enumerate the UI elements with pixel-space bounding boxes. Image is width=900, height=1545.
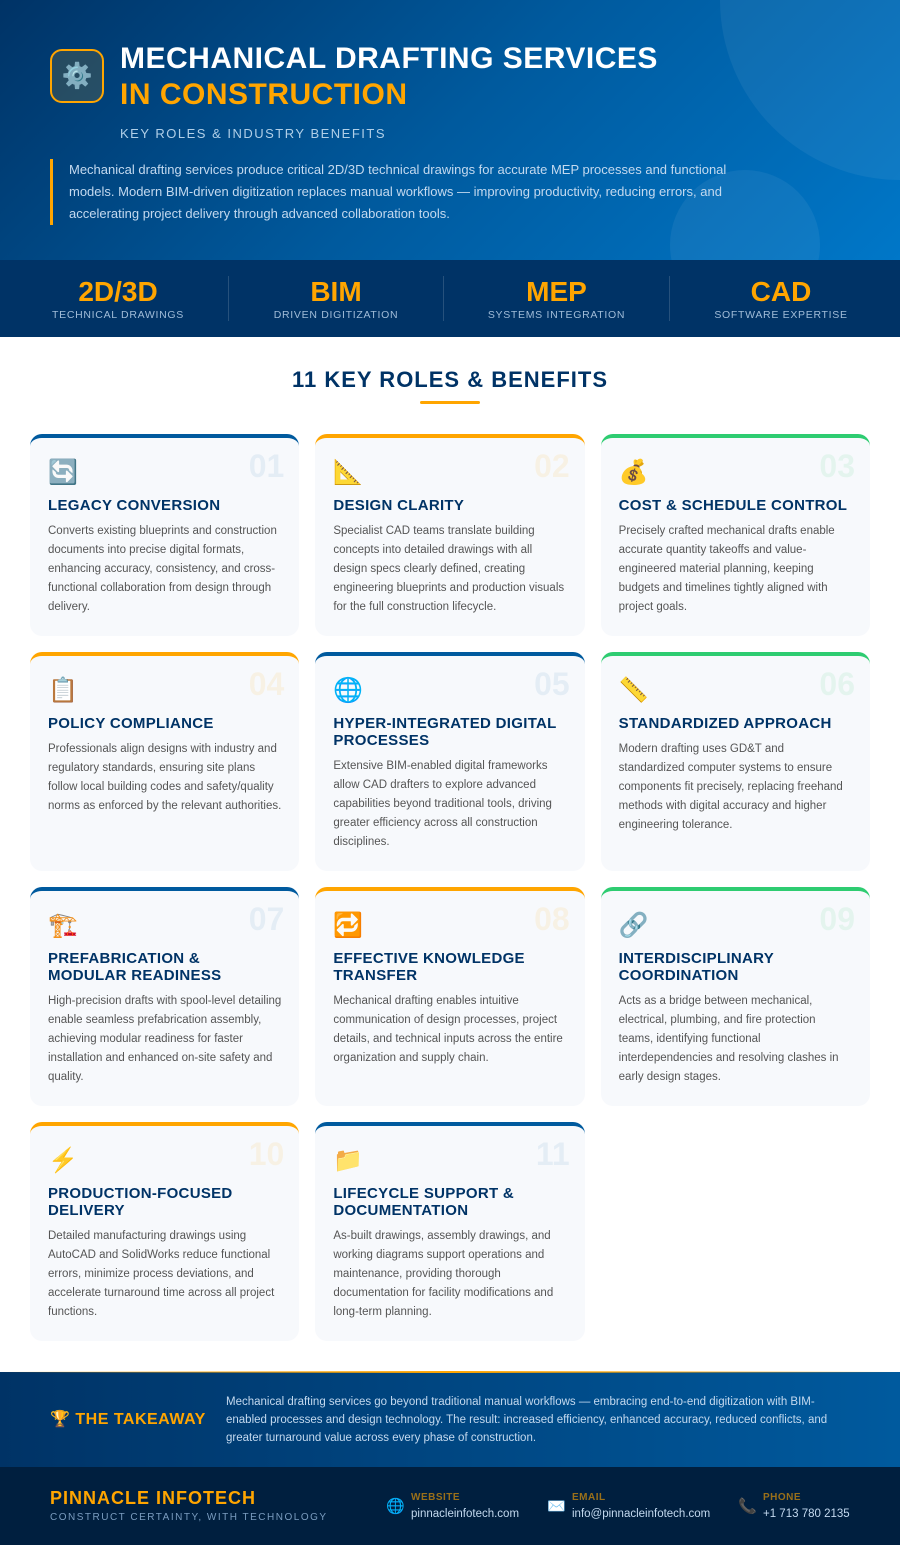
card 01: legacy conversion: 01 — [249, 448, 284, 484]
card 02: design clarity: DESIGN CLARITY — [333, 497, 464, 514]
takeaway text: Mechanical drafting services go beyond traditional manual workflows — embracing end-to-end digitization with BIM-enabled processes and design technology. The result: increased efficiency, enhanced accuracy, reduced conflicts, and greater turnaround value across every phase of construction. — [226, 1396, 827, 1444]
card 08: effective knowledge transfer: 08 — [534, 901, 570, 937]
card 09: interdisciplinary coordination — [601, 887, 870, 1106]
takeaway panel — [0, 1372, 900, 1467]
section heading: 11 KEY ROLES & BENEFITS — [292, 367, 608, 392]
website label: WEBSITE — [411, 1492, 460, 1503]
card 02: design clarity: Specialist CAD teams translate building concepts into detailed drawings with all design specs clearly defined, creating engineering blueprints and production visuals for the full construction lifecycle. — [333, 525, 564, 613]
card 03: cost and schedule control: Precisely crafted mechanical drafts enable accurate quantity takeoffs and value-engineered material planning, keeping budgets and timelines tightly aligned with project goals. — [619, 525, 835, 613]
card 01: legacy conversion: 🔄 — [48, 459, 78, 486]
phone value: +1 713 780 2135 — [763, 1508, 850, 1520]
email label: EMAIL — [572, 1492, 606, 1503]
stat: 2D/3D — [52, 276, 184, 321]
card 09: interdisciplinary coordination: 09 — [819, 901, 855, 937]
card 06: standardized approach: 📏 — [619, 677, 649, 704]
email value: info@pinnacleinfotech.com — [572, 1508, 710, 1520]
phone label: PHONE — [763, 1492, 801, 1503]
card 05: hyper-integrated digital processes: 🌐 — [333, 677, 363, 704]
card 07: prefabrication and modular readiness: 07 — [249, 901, 284, 937]
stat: BIM — [274, 276, 398, 321]
card 10: production-focused delivery: 10 — [249, 1136, 284, 1172]
footer panel — [0, 1467, 900, 1545]
title: MECHANICAL DRAFTING SERVICES — [120, 42, 658, 75]
website value: pinnacleinfotech.com — [411, 1508, 519, 1520]
card 02: design clarity: 📐 — [333, 459, 363, 486]
stat: BIM: DRIVEN DIGITIZATION — [274, 309, 398, 321]
icon: phone: 📞 — [738, 1498, 757, 1515]
card 05: hyper-integrated digital processes: 05 — [534, 666, 570, 702]
card 11: lifecycle support and documentation: 📁 — [333, 1147, 363, 1174]
card 10: production-focused delivery: PRODUCTION-FOCUSED DELIVERY — [48, 1185, 233, 1219]
icon: gear — [50, 49, 104, 103]
title — [120, 42, 658, 111]
card 08: effective knowledge transfer: EFFECTIVE KNOWLEDGE TRANSFER — [333, 950, 525, 984]
card 10: production-focused delivery — [30, 1122, 299, 1341]
card 02: design clarity: 02 — [534, 448, 570, 484]
card 01: legacy conversion — [30, 434, 299, 636]
card 11: lifecycle support and documentation: As-built drawings, assembly drawings, and working diagrams support operations and maintenance, providing thorough documentation for facility modifications and long-term planning. — [333, 1230, 553, 1318]
card 05: hyper-integrated digital processes — [315, 652, 585, 871]
icon: gear: ⚙️ — [62, 62, 93, 90]
card 02: design clarity — [315, 434, 585, 636]
stat: CAD: SOFTWARE EXPERTISE — [714, 309, 848, 321]
card 03: cost and schedule control — [601, 434, 870, 636]
title: IN CONSTRUCTION — [120, 78, 408, 111]
stat: 2D/3D: TECHNICAL DRAWINGS — [52, 309, 184, 321]
card 07: prefabrication and modular readiness: High-precision drafts with spool-level detailing enable seamless prefabrication assembly, achieving modular readiness for faster installation and enhanced on-site safety and quality. — [48, 995, 281, 1083]
card 07: prefabrication and modular readiness — [30, 887, 299, 1106]
card 11: lifecycle support and documentation — [315, 1122, 585, 1341]
card 04: policy compliance — [30, 652, 299, 871]
card 04: policy compliance: POLICY COMPLIANCE — [48, 715, 214, 732]
stat: CAD — [714, 276, 848, 321]
card 06: standardized approach — [601, 652, 870, 871]
card 05: hyper-integrated digital processes: Extensive BIM-enabled digital frameworks allow CAD drafters to explore advanced capabilities beyond traditional tools, driving greater efficiency across all construction disciplines. — [333, 760, 552, 848]
card 08: effective knowledge transfer: 🔁 — [333, 912, 363, 939]
header panel — [0, 0, 900, 260]
stat: MEP: MEP — [526, 276, 587, 307]
card 04: policy compliance: Professionals align designs with industry and regulatory standards, ensuring site plans follow local building codes and safety/quality norms as enforced by the relevant authorities. — [48, 743, 281, 812]
icon: email: ✉️ — [547, 1498, 566, 1515]
card 09: interdisciplinary coordination: Acts as a bridge between mechanical, electrical, plumbing, and fire protection teams, identifying functional interdependencies and resolving clashes in early design stages. — [619, 995, 839, 1083]
card 06: standardized approach: STANDARDIZED APPROACH — [619, 715, 832, 732]
card 07: prefabrication and modular readiness: PREFABRICATION & MODULAR READINESS — [48, 950, 221, 984]
subtitle: KEY ROLES & INDUSTRY BENEFITS — [120, 126, 386, 140]
card 09: interdisciplinary coordination: INTERDISCIPLINARY COORDINATION — [619, 950, 774, 984]
card 03: cost and schedule control: COST & SCHEDULE CONTROL — [619, 497, 847, 514]
card 10: production-focused delivery: ⚡ — [48, 1147, 78, 1174]
card 03: cost and schedule control: 03 — [819, 448, 855, 484]
card 09: interdisciplinary coordination: 🔗 — [619, 912, 649, 939]
card 08: effective knowledge transfer: Mechanical drafting enables intuitive communication of design processes, project details, and technical inputs across the entire organization and supply chain. — [333, 995, 563, 1064]
stat: 2D/3D: 2D/3D — [78, 276, 158, 307]
card 11: lifecycle support and documentation: LIFECYCLE SUPPORT & DOCUMENTATION — [333, 1185, 514, 1219]
stats bar — [0, 260, 900, 337]
intro text: Mechanical drafting services produce critical 2D/3D technical drawings for accurate MEP processes and functional models. Modern BIM-driven digitization replaces manual workflows — improving productivity, reducing errors, and accelerating project delivery through advanced collaboration tools. — [69, 162, 726, 221]
icon: website: 🌐 — [386, 1498, 405, 1515]
card 11: lifecycle support and documentation: 11 — [536, 1136, 570, 1172]
brand tagline: CONSTRUCT CERTAINTY, WITH TECHNOLOGY — [50, 1512, 328, 1523]
card 06: standardized approach: Modern drafting uses GD&T and standardized computer systems to ensure components fit precisely, replacing freehand methods with digital accuracy and higher engineering tolerance. — [619, 743, 843, 831]
stat: MEP: SYSTEMS INTEGRATION — [488, 309, 625, 321]
card 05: hyper-integrated digital processes: HYPER-INTEGRATED DIGITAL PROCESSES — [333, 715, 556, 749]
card 10: production-focused delivery: Detailed manufacturing drawings using AutoCAD and SolidWorks reduce functional errors, minimize process deviations, and accelerate turnaround time across all project functions. — [48, 1230, 274, 1318]
card 01: legacy conversion: LEGACY CONVERSION — [48, 497, 220, 514]
card 04: policy compliance: 📋 — [48, 677, 78, 704]
card 08: effective knowledge transfer — [315, 887, 585, 1106]
brand name: PINNACLE INFOTECH — [50, 1488, 256, 1508]
takeaway heading: 🏆 THE TAKEAWAY — [50, 1411, 206, 1428]
card 01: legacy conversion: Converts existing blueprints and construction documents into precise digital formats, enhancing accuracy, consistency, and cross-functional collaboration from design through delivery. — [48, 525, 277, 613]
card 03: cost and schedule control: 💰 — [619, 459, 649, 486]
card 06: standardized approach: 06 — [819, 666, 855, 702]
stat: BIM: BIM — [310, 276, 362, 307]
card 04: policy compliance: 04 — [249, 666, 284, 702]
stat: MEP — [488, 276, 625, 321]
card 07: prefabrication and modular readiness: 🏗️ — [48, 912, 78, 939]
stat: CAD: CAD — [751, 276, 811, 307]
